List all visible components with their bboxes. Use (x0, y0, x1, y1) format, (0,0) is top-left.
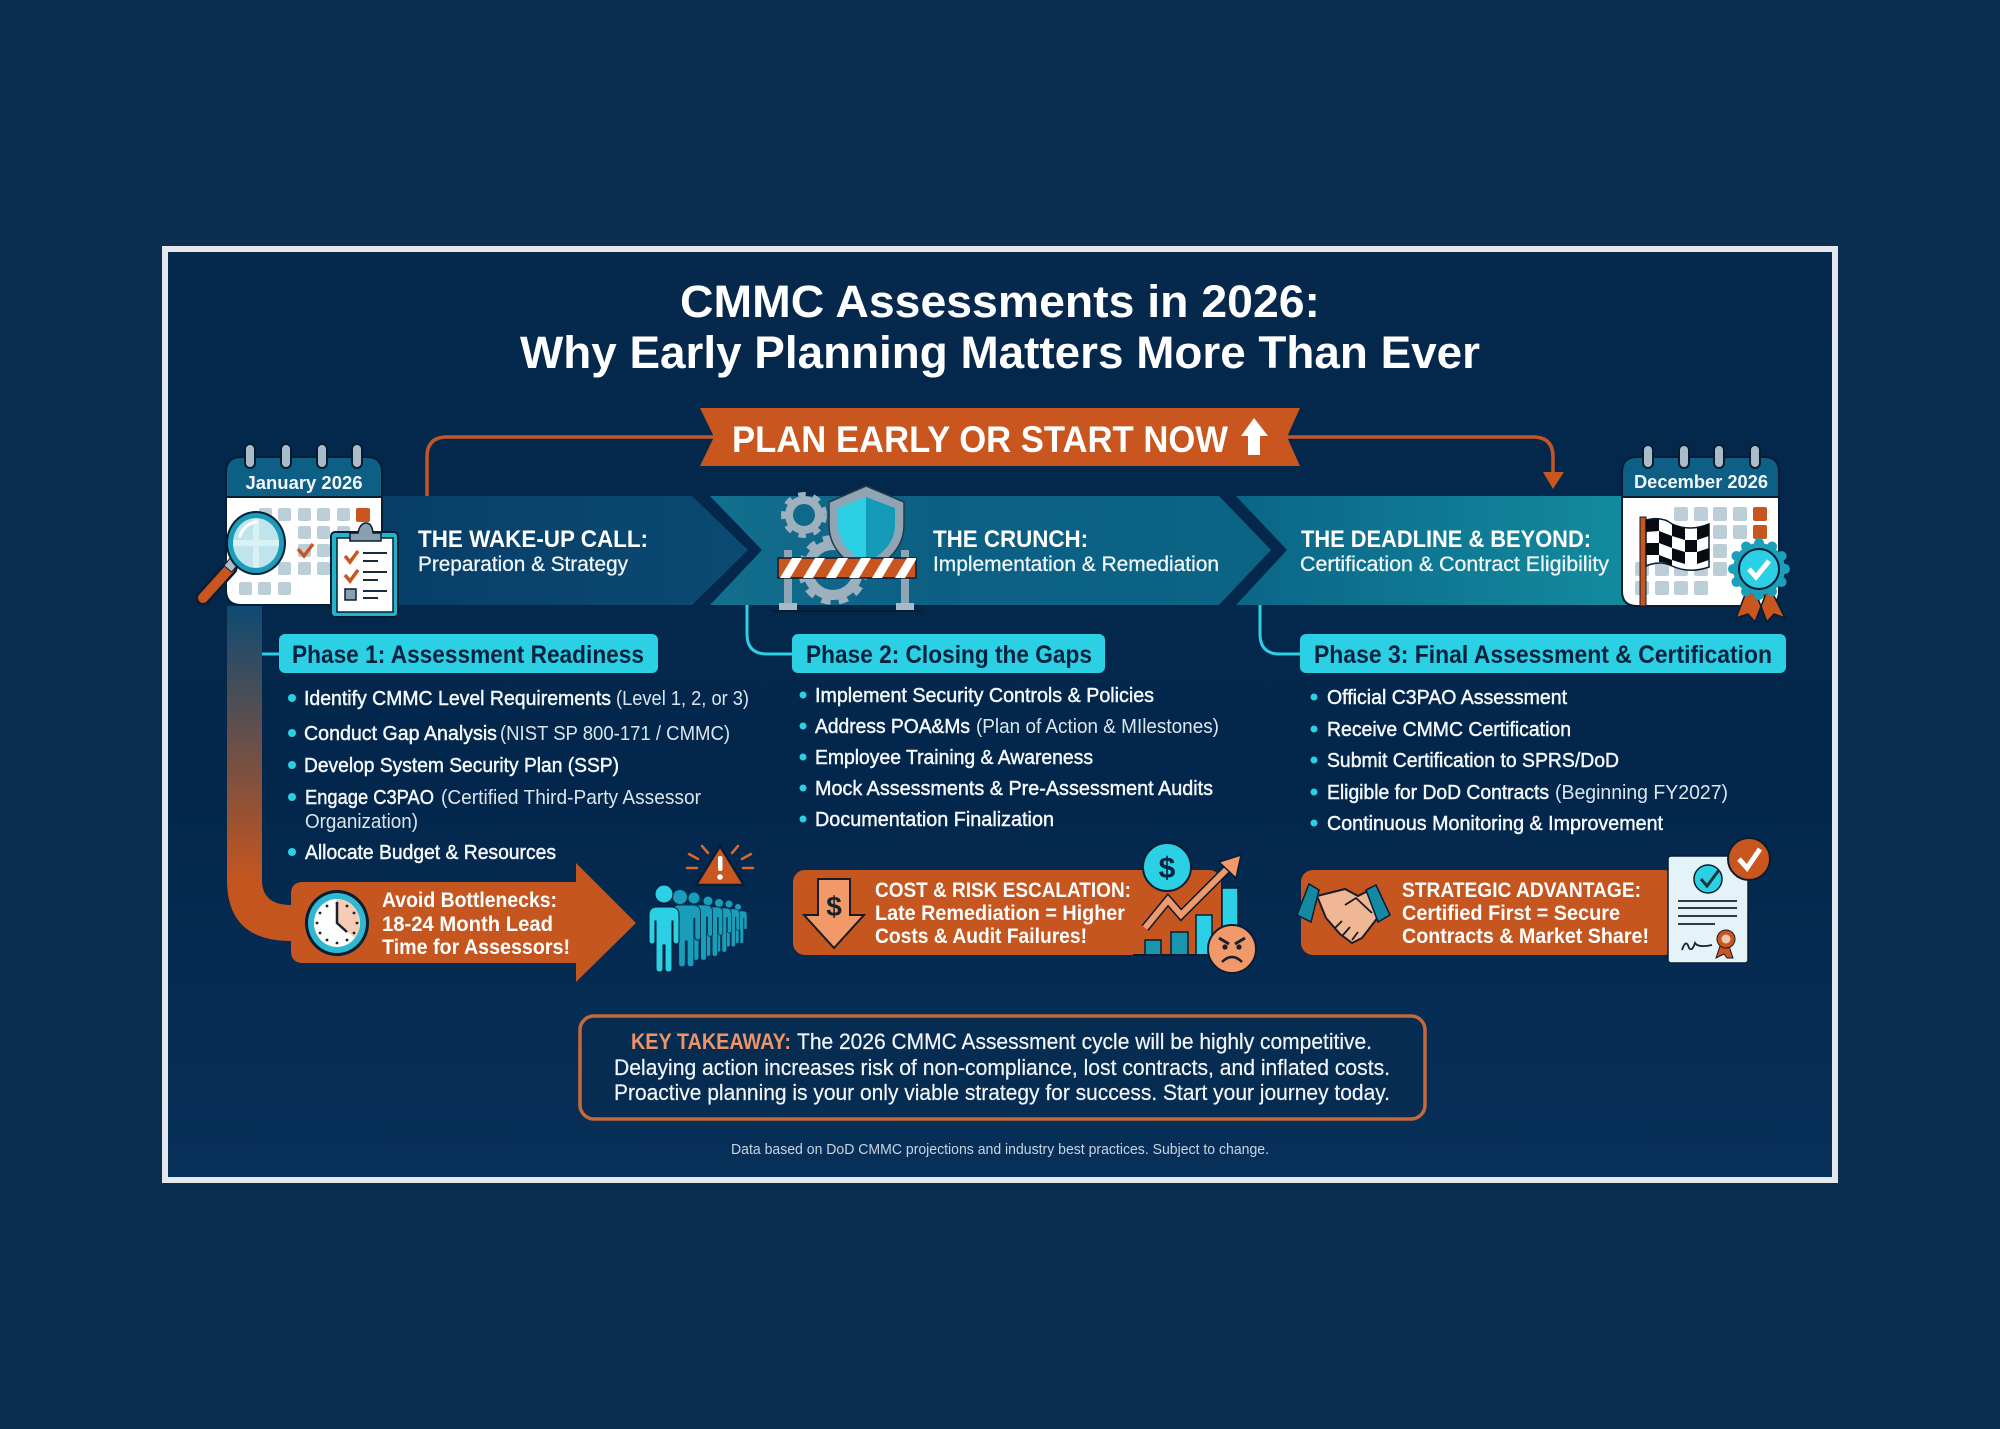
arrowhead: to deadline (1543, 472, 1564, 489)
phase 1 bullets: Allocate Budget & Resources (305, 841, 556, 864)
callout: cost and risk escalation: Costs & Audit Failures! (875, 925, 1087, 948)
phase 2 heading: Phase 2: Closing the Gaps (806, 641, 1092, 669)
phase 1 bullets (288, 687, 749, 864)
key takeaway box: Proactive planning is your only viable strategy for success. Start your journey today. (614, 1080, 1390, 1105)
icon: December calendar with flag and badge (1622, 445, 1785, 622)
phase 3 bullets: Official C3PAO Assessment (1327, 686, 1567, 709)
phase 3 bullets: Continuous Monitoring & Improvement (1327, 812, 1663, 835)
clipboard (331, 523, 398, 617)
phase 1 heading (279, 634, 658, 673)
phase 2 bullets: Documentation Finalization (815, 808, 1054, 831)
phase 2 bullets: Employee Training & Awareness (815, 746, 1093, 769)
chevron: the deadline and beyond: Certification & Contract Eligibility (1300, 553, 1609, 576)
framed panel (165, 249, 1835, 1180)
phase 1 bullets: Conduct Gap Analysis (304, 722, 497, 745)
key takeaway box: Delaying action increases risk of non-compliance, lost contracts, and inflated costs. (614, 1055, 1390, 1080)
phase 2 heading (792, 634, 1105, 673)
chevron: the deadline and beyond (1236, 496, 1640, 605)
phase 1 bullets: Organization) (305, 810, 418, 833)
chevron: the crunch (710, 496, 1271, 605)
icon: shield, gears and barrier (773, 486, 922, 611)
icon: angry face (1208, 925, 1256, 973)
callout: strategic advantage: Certified First = Secure (1402, 902, 1620, 925)
phase 3 bullets: Receive CMMC Certification (1327, 718, 1571, 741)
icon: down arrow with dollar: $ (826, 891, 842, 922)
icon: approved check (1728, 838, 1770, 880)
connector: phase 2 (747, 605, 794, 654)
title (520, 276, 1480, 378)
banner: plan early or start now: PLAN EARLY OR START NOW (732, 419, 1228, 460)
phase 2 bullets: Address POA&Ms (815, 715, 970, 738)
title: CMMC Assessments in 2026: (680, 276, 1320, 327)
callout: cost and risk escalation: Late Remediation = Higher (875, 902, 1125, 925)
callout: strategic advantage: STRATEGIC ADVANTAGE: (1402, 879, 1641, 902)
icon: rising cost chart (1133, 843, 1256, 973)
phase 2 bullets: (Plan of Action & MIlestones) (976, 715, 1219, 738)
callout: strategic advantage: Contracts & Market Share! (1402, 925, 1649, 948)
phase 1 heading: Phase 1: Assessment Readiness (292, 641, 644, 669)
chevron: the wake-up call (382, 496, 748, 605)
connector: phase 3 (1260, 605, 1302, 654)
title: Why Early Planning Matters More Than Ever (520, 327, 1480, 378)
callout: cost and risk escalation (793, 870, 1221, 955)
icon: certificate (1668, 838, 1770, 963)
swoosh from January to bottleneck arrow (227, 606, 295, 941)
panel: phase 3 (1300, 634, 1786, 835)
icon: warning triangle (687, 846, 753, 885)
icon: clock (305, 890, 369, 956)
connector lines from banner (427, 437, 1553, 496)
chevron: the deadline and beyond: THE DEADLINE & BEYOND: (1301, 526, 1591, 553)
icon: up arrow (1241, 418, 1268, 455)
phase 1 bullets: Engage C3PAO (305, 786, 434, 809)
certified badge (1733, 543, 1785, 622)
icon: down arrow with dollar (804, 879, 864, 948)
icon: dollar coin: $ (1159, 852, 1176, 885)
banner: plan early or start now (700, 408, 1300, 466)
icon: January calendar with magnifier and clipboard: January 2026 (246, 472, 362, 493)
phase 3 heading: Phase 3: Final Assessment & Certification (1314, 641, 1772, 669)
phase 2 bullets (800, 684, 1219, 831)
callout: avoid bottlenecks: Time for Assessors! (382, 936, 570, 959)
phase 1 bullets: (Certified Third-Party Assessor (441, 786, 701, 809)
chevron: the wake-up call: THE WAKE-UP CALL: (418, 526, 648, 553)
icon: queue of people (649, 885, 747, 972)
callout: avoid bottlenecks (291, 863, 636, 982)
phase 1 bullets: Develop System Security Plan (SSP) (304, 754, 619, 777)
phase 3 bullets: (Beginning FY2027) (1555, 781, 1728, 804)
phase 2 bullets: Implement Security Controls & Policies (815, 684, 1154, 707)
phase 3 bullets: Submit Certification to SPRS/DoD (1327, 749, 1619, 772)
key takeaway box: KEY TAKEAWAY: (631, 1029, 791, 1054)
chevron: the wake-up call: Preparation & Strategy (418, 553, 628, 576)
phase 1 bullets: Identify CMMC Level Requirements (304, 687, 611, 710)
key takeaway box (580, 1016, 1425, 1119)
phase 1 bullets: (Level 1, 2, or 3) (616, 687, 749, 710)
chevron: the crunch: THE CRUNCH: (933, 526, 1088, 553)
key takeaway box: The 2026 CMMC Assessment cycle will be highly competitive. (797, 1029, 1372, 1054)
phase 3 bullets: Eligible for DoD Contracts (1327, 781, 1549, 804)
icon: December calendar with flag and badge: December 2026 (1634, 471, 1768, 492)
checkered flag (1640, 517, 1709, 606)
chevron: the crunch: Implementation & Remediation (933, 553, 1219, 576)
callout: cost and risk escalation: COST & RISK ESCALATION: (875, 879, 1131, 902)
callout: avoid bottlenecks: Avoid Bottlenecks: (382, 889, 557, 912)
panel: phase 2 (792, 634, 1219, 831)
phase 3 heading (1300, 634, 1786, 673)
callout: strategic advantage (1297, 870, 1676, 955)
connector: phase 1 (262, 652, 280, 656)
panel: phase 1 (279, 634, 749, 864)
footnote: Data based on DoD CMMC projections and industry best practices. Subject to change. (731, 1141, 1269, 1158)
infographic canvas (162, 246, 1838, 1183)
icon: medal (1716, 930, 1735, 958)
phase 1 bullets: (NIST SP 800-171 / CMMC) (500, 722, 730, 745)
callout: avoid bottlenecks: 18-24 Month Lead (382, 913, 553, 936)
magnifier (203, 511, 286, 598)
phase 3 bullets (1310, 686, 1728, 835)
icon: handshake (1297, 884, 1390, 943)
phase 2 bullets: Mock Assessments & Pre-Assessment Audits (815, 777, 1213, 800)
icon: January calendar with magnifier and clipboard (203, 444, 398, 617)
